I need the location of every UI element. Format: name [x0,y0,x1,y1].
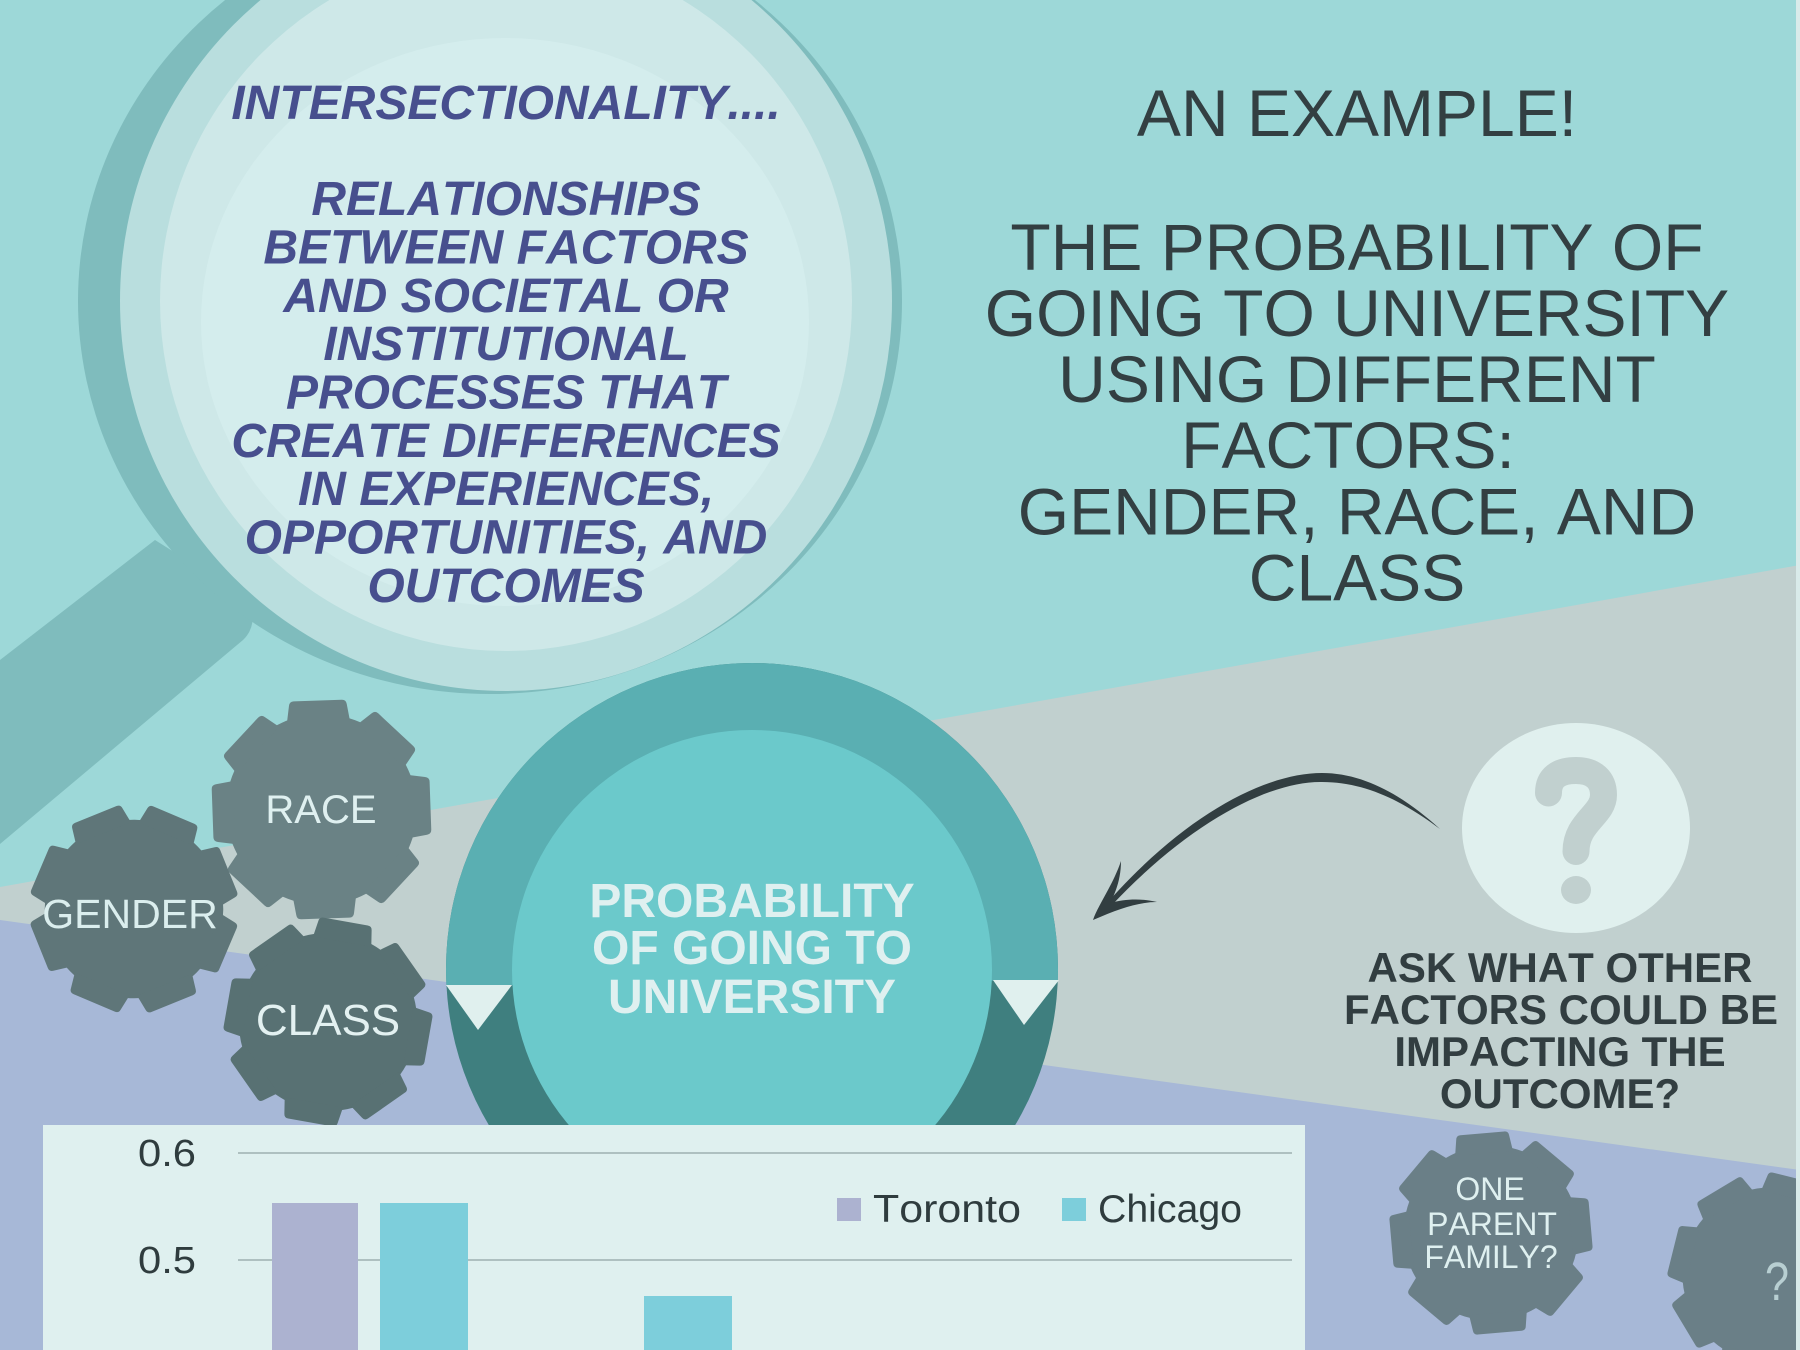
definition text in lens: IN EXPERIENCES, [298,463,714,516]
gear: gender: GENDER [42,891,218,937]
definition text in lens: AND SOCIETAL OR [282,270,729,323]
definition text in lens: OUTCOMES [367,560,645,613]
central circle: probability of going to university [446,663,1059,1125]
definition text in lens: RELATIONSHIPS [311,173,701,226]
magnifier lens centre [201,38,809,606]
icon: question mark circle [1462,723,1690,933]
magnifying glass [0,0,902,844]
definition text in lens [231,77,781,613]
definition text in lens: OPPORTUNITIES, AND [245,512,767,564]
legend: Chicago [1098,1188,1242,1231]
legend: Toronto [873,1188,1021,1231]
background: blue band [0,920,1800,1350]
prompt: ask what other factors: OUTCOME? [1440,1070,1680,1117]
legend [837,1188,1242,1231]
ring lower part [446,663,1058,1275]
chart panel [43,1125,1305,1350]
heading: an example: AN EXAMPLE! [1137,76,1577,150]
gear: gender [0,775,268,1043]
gear: one parent family: PARENT [1427,1206,1557,1242]
gear: class: CLASS [256,996,400,1045]
prompt: ask what other factors: FACTORS COULD BE [1344,986,1778,1033]
definition text in lens: BETWEEN FACTORS [263,222,749,274]
prompt: ask what other factors: IMPACTING THE [1394,1028,1726,1075]
heading: an example: GENDER, RACE, AND [1018,474,1696,548]
heading: an example [985,76,1729,614]
arrow: from question to central circle [1093,773,1440,920]
grid lines and axis labels [138,1133,1292,1282]
magnifier lens middle [160,0,852,651]
gear: class [210,904,446,1140]
heading: an example: USING DIFFERENT [1058,342,1656,416]
gear: one parent family: ONE [1455,1171,1525,1207]
grid lines and axis labels: 0.5 [138,1240,196,1282]
definition text in lens: CREATE DIFFERENCES [231,415,781,468]
gear: one parent family: FAMILY? [1424,1239,1558,1275]
ring upper part [446,663,1058,986]
definition text in lens: INSTITUTIONAL [323,318,689,371]
definition text in lens: INTERSECTIONALITY.... [231,77,781,130]
disc label [589,875,915,1024]
background: grey band [0,565,1800,1350]
disc label: OF GOING TO [592,922,912,975]
panel background [43,1125,1305,1350]
heading: an example: THE PROBABILITY OF [1010,210,1704,284]
heading: an example: GOING TO UNIVERSITY [985,276,1729,350]
heading: an example: FACTORS: [1181,408,1515,482]
gear: race [209,697,434,922]
bar: Toronto group 1 [272,1203,358,1350]
magnifier lens rim [120,0,892,691]
definition text in lens: PROCESSES THAT [286,366,730,420]
bar: Chicago group 2 [644,1296,732,1350]
right triangle marker [993,980,1059,1025]
magnifier handle [0,540,253,844]
gear: one parent family [1383,1125,1599,1341]
disc label: UNIVERSITY [608,971,896,1024]
heading: an example: CLASS [1249,540,1465,614]
magnifier outer ring [78,0,902,694]
prompt: ask what other factors: ASK WHAT OTHER [1368,944,1752,991]
inner disc [512,730,992,1210]
grid lines and axis labels: 0.6 [138,1133,196,1175]
right edge strip [1796,0,1800,1350]
prompt: ask what other factors [1344,944,1778,1117]
gear: race: RACE [265,788,377,832]
disc label: PROBABILITY [589,875,915,928]
left triangle marker [446,985,512,1030]
gear: unknown factor [1649,1154,1800,1350]
gear: unknown factor: ? [1765,1252,1789,1312]
bar: Chicago group 1 [380,1203,468,1350]
